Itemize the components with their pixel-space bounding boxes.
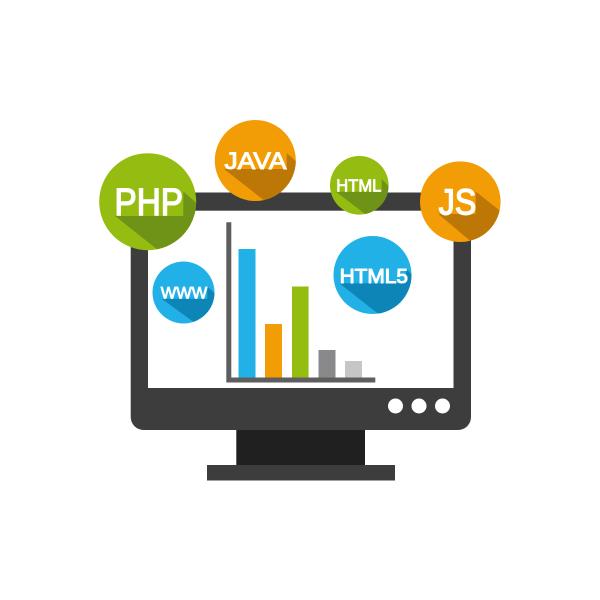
monitor buttons [388, 398, 450, 414]
badge: PHP: PHP [114, 182, 183, 224]
bar: blue [238, 249, 256, 378]
badge: HTML [330, 156, 392, 217]
badge: JS [420, 161, 504, 244]
monitor stand neck [236, 430, 365, 465]
bar: orange [265, 324, 282, 378]
monitor [131, 192, 471, 480]
bar: dark grey [318, 350, 336, 378]
monitor body [131, 192, 471, 430]
badge: PHP [99, 153, 200, 256]
bar: light grey [345, 361, 362, 378]
badge: HTML5: HTML5 [340, 265, 408, 288]
badge: JAVA [215, 120, 300, 205]
monitor stand base [207, 465, 395, 480]
badge: HTML5 [334, 236, 415, 316]
badge: HTML: HTML [336, 176, 382, 196]
bar chart [226, 222, 375, 382]
badge: WWW [152, 262, 214, 324]
monitor screen [148, 211, 454, 388]
chart axes [226, 222, 375, 382]
badge: JS: JS [439, 182, 476, 223]
badge: JAVA: JAVA [224, 148, 286, 175]
bar: green [292, 286, 309, 378]
badge: WWW: WWW [161, 284, 208, 302]
